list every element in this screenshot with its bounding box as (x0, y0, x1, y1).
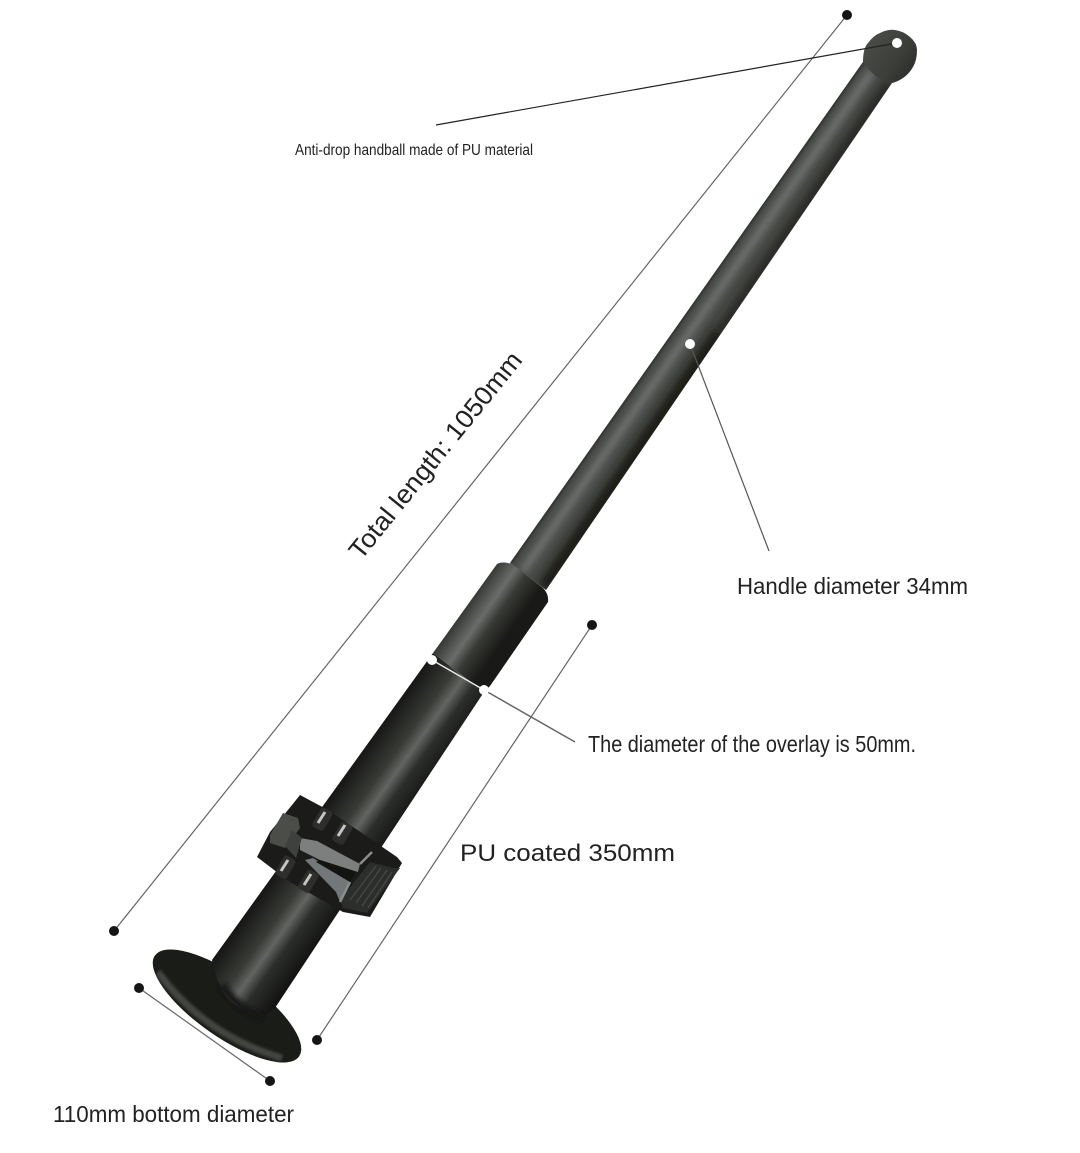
callout line: overlay diameter (427, 655, 575, 742)
dimension line: bottom diameter (134, 983, 275, 1086)
label: bottom diameter: 110mm bottom diameter (53, 1101, 294, 1127)
clamp pins (274, 806, 354, 894)
label: total length: Total length: 1050mm (342, 345, 528, 565)
handball tip (863, 30, 917, 83)
handle shaft (510, 62, 892, 590)
clamp metal bars (285, 830, 372, 902)
base disc (152, 950, 302, 1062)
lower shaft (212, 653, 484, 1016)
clamp (257, 795, 402, 917)
dimension line: PU coated (312, 620, 597, 1045)
overlay sleeve (433, 562, 548, 692)
callout line: handball (436, 38, 902, 125)
product: telescopic handle (137, 30, 920, 1082)
label: handle diameter: Handle diameter 34mm (737, 573, 968, 599)
shaft foot shadow (222, 985, 262, 1018)
callout line: handle diameter (685, 339, 769, 551)
label: handball: Anti-drop handball made of PU material (295, 142, 533, 159)
label: overlay diameter: The diameter of the overlay is 50mm. (588, 731, 916, 757)
label: PU coated: PU coated 350mm (460, 840, 675, 867)
clamp knob (270, 813, 300, 848)
dimension line: total length (109, 10, 852, 936)
clamp knurled grip (340, 862, 400, 913)
